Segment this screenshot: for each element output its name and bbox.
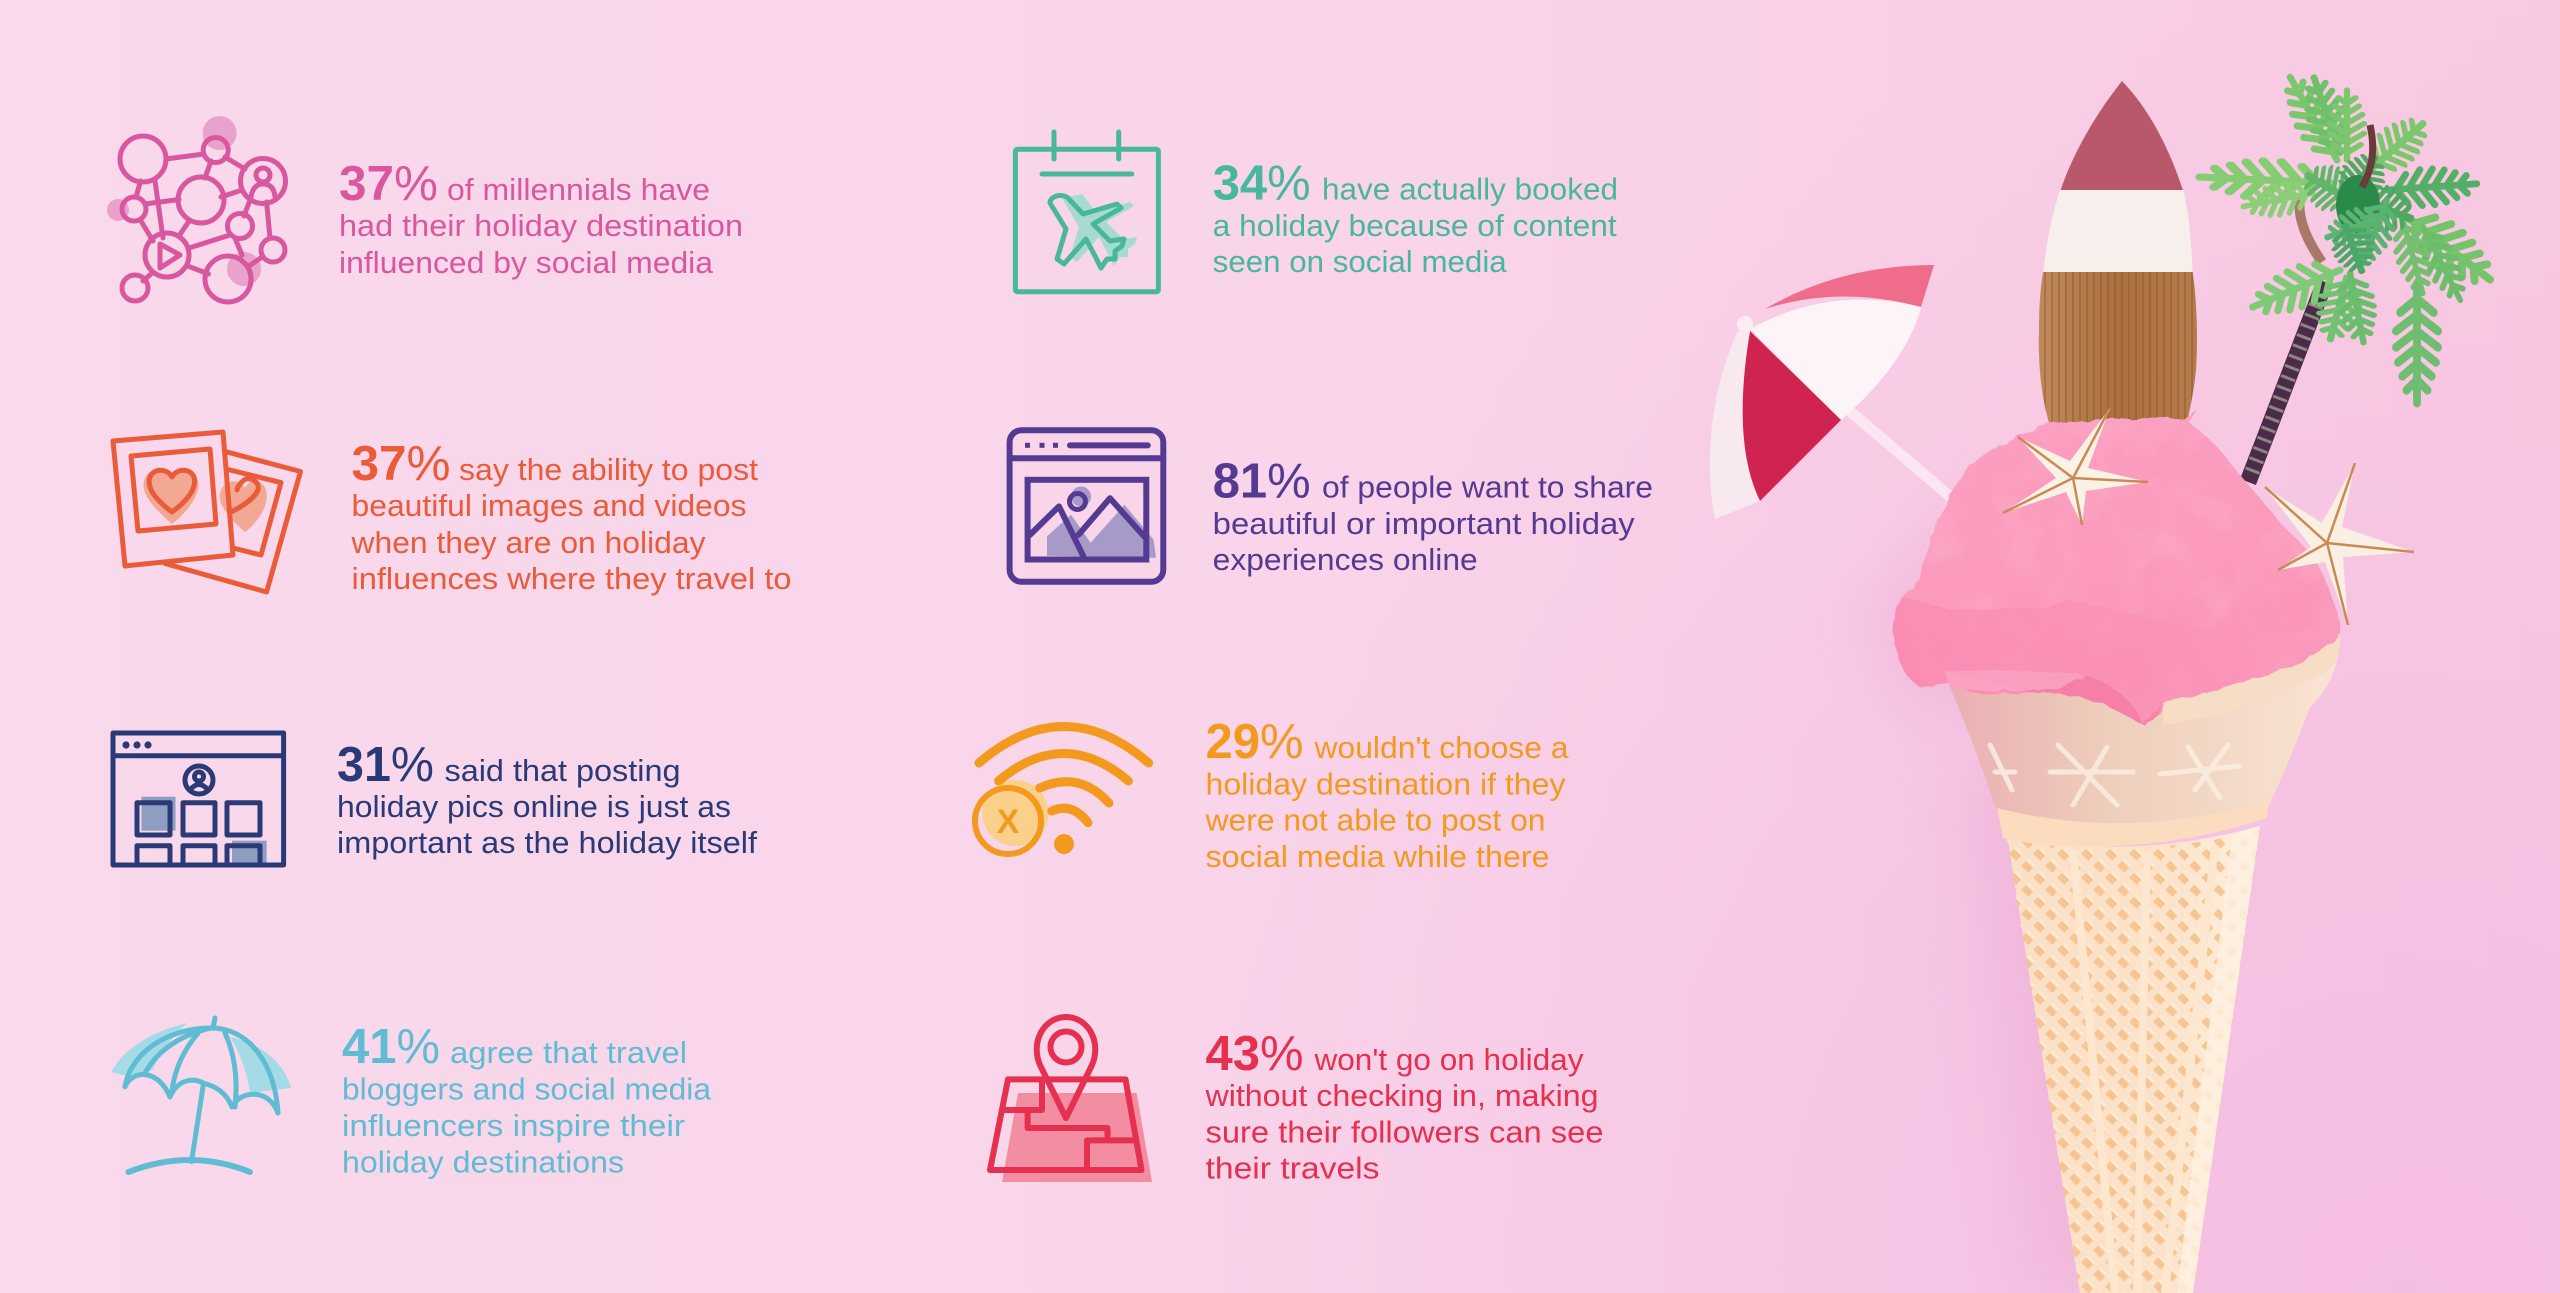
text: 41% bloggers: holiday destinations xyxy=(342,1144,624,1180)
text: 43% checking in: won't go on holiday xyxy=(1313,1042,1584,1077)
text: 81% share: experiences online xyxy=(1213,542,1478,577)
text: 34% booked xyxy=(1213,156,1618,279)
text: 37% of millennials: influenced by social media xyxy=(339,245,714,280)
cone upper cup xyxy=(1947,640,2340,830)
text: 81% share: of people want to share xyxy=(1322,470,1653,504)
starfish right xyxy=(2265,463,2414,625)
text: 43% checking in: without checking in, making xyxy=(1204,1078,1598,1113)
text: 81% share xyxy=(1213,454,1653,577)
text: 37% beautiful images: say the ability to post xyxy=(459,452,758,487)
icon: calendar with plane xyxy=(1015,132,1158,292)
text: 29% wouldn't choose: holiday destination if they xyxy=(1206,766,1566,802)
icon: heart photos xyxy=(113,432,300,592)
text: 37% beautiful images: beautiful images and videos xyxy=(352,488,746,523)
text: 31% posting pics: holiday pics online is just as xyxy=(337,789,731,824)
text: 43% checking in: 43% xyxy=(1206,1027,1304,1081)
stat: 43% checking in xyxy=(990,1017,1604,1186)
cup snowflake decorations xyxy=(1990,745,2240,805)
text: 37% beautiful images: influences where they travel to xyxy=(352,561,792,596)
icon: beach umbrella xyxy=(112,1018,291,1172)
stat: 31% posting pics xyxy=(113,733,757,865)
text: 43% checking in xyxy=(1204,1027,1604,1186)
text: 37% beautiful images: when they are on holiday xyxy=(350,525,706,560)
text: 41% bloggers: influencers inspire their xyxy=(342,1108,685,1143)
waffle cone xyxy=(2007,826,2260,1293)
surfboard xyxy=(2039,81,2197,426)
icon: map with pin xyxy=(990,1017,1152,1182)
stat: 29% wouldn't choose xyxy=(975,715,1569,874)
text: 29% wouldn't choose: social media while there xyxy=(1206,839,1550,874)
text: 29% wouldn't choose: 29% xyxy=(1206,715,1304,769)
icon: wifi with x: X xyxy=(997,803,1020,841)
photo: ice cream cone with beach toppers xyxy=(1710,68,2503,1293)
palm tree xyxy=(2199,68,2503,482)
text: 34% booked: 34% xyxy=(1213,156,1311,210)
ice cream cone xyxy=(1880,400,2360,1293)
text: 34% booked: seen on social media xyxy=(1213,244,1507,279)
stat: 37% of millennials xyxy=(107,116,743,302)
text: 31% posting pics: 31% xyxy=(337,738,434,792)
stat: 34% booked xyxy=(1015,132,1618,292)
text: 31% posting pics xyxy=(337,738,757,860)
text: 37% of millennials: had their holiday destination xyxy=(339,208,743,243)
stat: 41% bloggers xyxy=(112,1018,712,1180)
cone collar xyxy=(1997,800,2268,846)
text: 31% posting pics: important as the holiday itself xyxy=(337,825,757,860)
text: 29% wouldn't choose: were not able to post on xyxy=(1204,802,1546,838)
icon: wifi with x xyxy=(975,726,1149,854)
text: 43% checking in: sure their followers can see xyxy=(1206,1114,1604,1150)
text: 34% booked: have actually booked xyxy=(1322,172,1618,206)
text: 37% beautiful images: 37% xyxy=(352,437,450,491)
icon: browser with photo xyxy=(1010,430,1163,582)
text: 37% beautiful images xyxy=(350,437,792,596)
text: 34% booked: a holiday because of content xyxy=(1213,208,1617,243)
icon: profile window xyxy=(113,733,284,865)
cone shadow xyxy=(1870,500,2120,1293)
text: 41% bloggers: bloggers and social media xyxy=(342,1072,712,1106)
text: 43% checking in: their travels xyxy=(1206,1150,1380,1186)
text: 81% share: 81% xyxy=(1213,454,1311,508)
text: 29% wouldn't choose: wouldn't choose a xyxy=(1313,730,1569,765)
beach umbrella topper xyxy=(1710,265,1967,519)
icon: social network xyxy=(107,116,286,302)
starfish left xyxy=(2003,408,2148,525)
text: 31% posting pics: said that posting xyxy=(444,753,680,788)
text: 29% wouldn't choose xyxy=(1204,715,1569,874)
cup rim xyxy=(2163,633,2340,725)
text: 37% of millennials: of millennials have xyxy=(447,172,710,207)
stat: 37% beautiful images xyxy=(113,432,792,596)
text: 41% bloggers xyxy=(342,1020,712,1180)
text: 41% bloggers: 41% xyxy=(342,1020,440,1074)
text: 37% of millennials xyxy=(339,157,743,280)
text: 41% bloggers: agree that travel xyxy=(450,1035,687,1070)
text: 81% share: beautiful or important holiday xyxy=(1213,506,1635,541)
text: 37% of millennials: 37% xyxy=(339,157,438,211)
stat: 81% share xyxy=(1010,430,1653,582)
ice cream scoop xyxy=(1892,410,2340,726)
